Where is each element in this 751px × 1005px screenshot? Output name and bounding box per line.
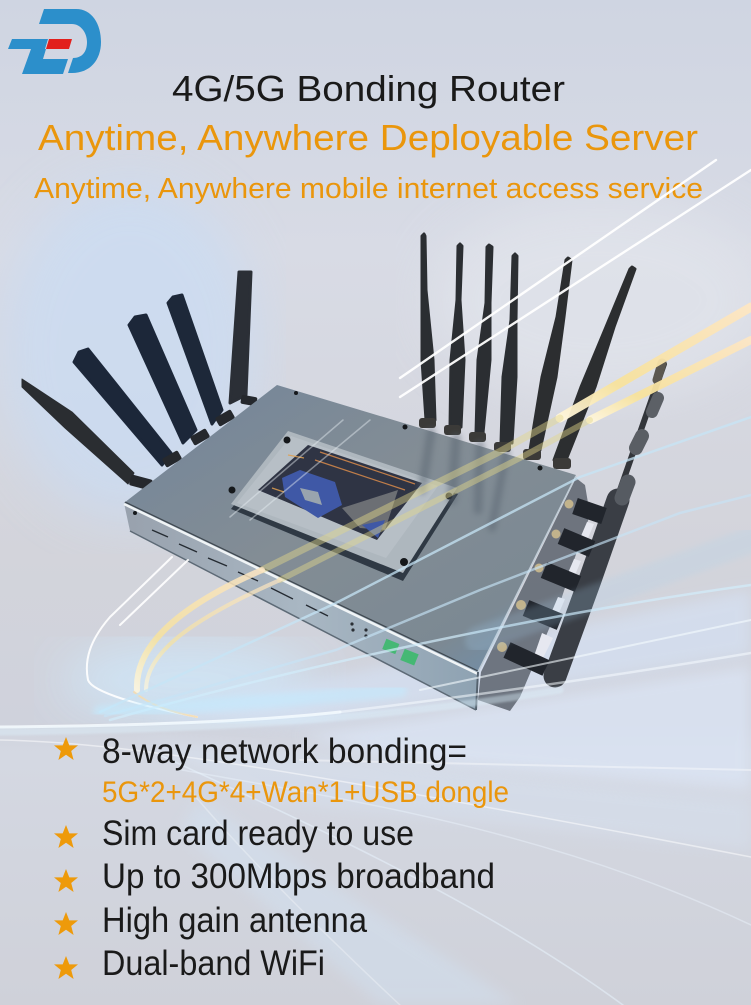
connectors (507, 506, 604, 668)
top face (124, 385, 576, 672)
feature: wifi: Dual-band WiFi (102, 944, 325, 983)
antenna right 1 (422, 234, 435, 420)
feature: bonding: 5G*2+4G*4+Wan*1+USB dongle (102, 776, 509, 809)
bright band (0, 712, 340, 727)
antenna right 3 (476, 245, 492, 433)
antenna left 4 (168, 295, 222, 424)
white arcs lower left (87, 557, 197, 717)
antenna right 6 (554, 267, 635, 460)
orange beams over device (262, 418, 560, 570)
antenna left 3 (129, 315, 196, 443)
side antenna tips (620, 363, 664, 498)
antenna left 1 (22, 379, 134, 484)
subtitle: Anytime, Anywhere Deployable Server (38, 117, 698, 158)
logo (8, 9, 101, 74)
orange beams (560, 307, 751, 418)
antenna right 5 (530, 258, 571, 450)
antenna right 4 (501, 254, 517, 443)
plate screws (133, 391, 542, 566)
router body (124, 385, 594, 711)
blue beams (100, 417, 751, 712)
green terminals (382, 639, 399, 654)
front face (124, 503, 478, 710)
white lines across lid (230, 420, 343, 517)
side antennas and connectors (497, 363, 664, 676)
antenna bases (129, 395, 571, 491)
gold nuts (497, 500, 574, 652)
screen plate (231, 436, 458, 581)
side antenna bar (555, 500, 618, 676)
feature: sim card: Sim card ready to use (102, 814, 414, 853)
lower fan lines (0, 740, 751, 857)
white lines upper (400, 160, 716, 378)
antenna shadows on lid (422, 432, 506, 528)
tagline: Anytime, Anywhere mobile internet access service (34, 173, 703, 205)
feature: bonding: 8-way network bonding= (102, 732, 467, 771)
antenna left 2 (74, 349, 171, 465)
rear antennas (22, 234, 635, 484)
antenna left 5 (230, 272, 251, 403)
orange arc (137, 570, 262, 690)
feature: antenna: High gain antenna (102, 901, 367, 940)
feature: broadband: Up to 300Mbps broadband (102, 857, 495, 896)
side plate (478, 478, 590, 711)
title: 4G/5G Bonding Router (172, 68, 565, 109)
indicator leds (350, 622, 368, 638)
feature list (54, 732, 509, 983)
antenna right 2 (450, 244, 464, 427)
front port marks (152, 530, 328, 616)
plate windows (534, 522, 594, 660)
feature: bonding (54, 732, 509, 809)
touch screen (258, 445, 422, 540)
